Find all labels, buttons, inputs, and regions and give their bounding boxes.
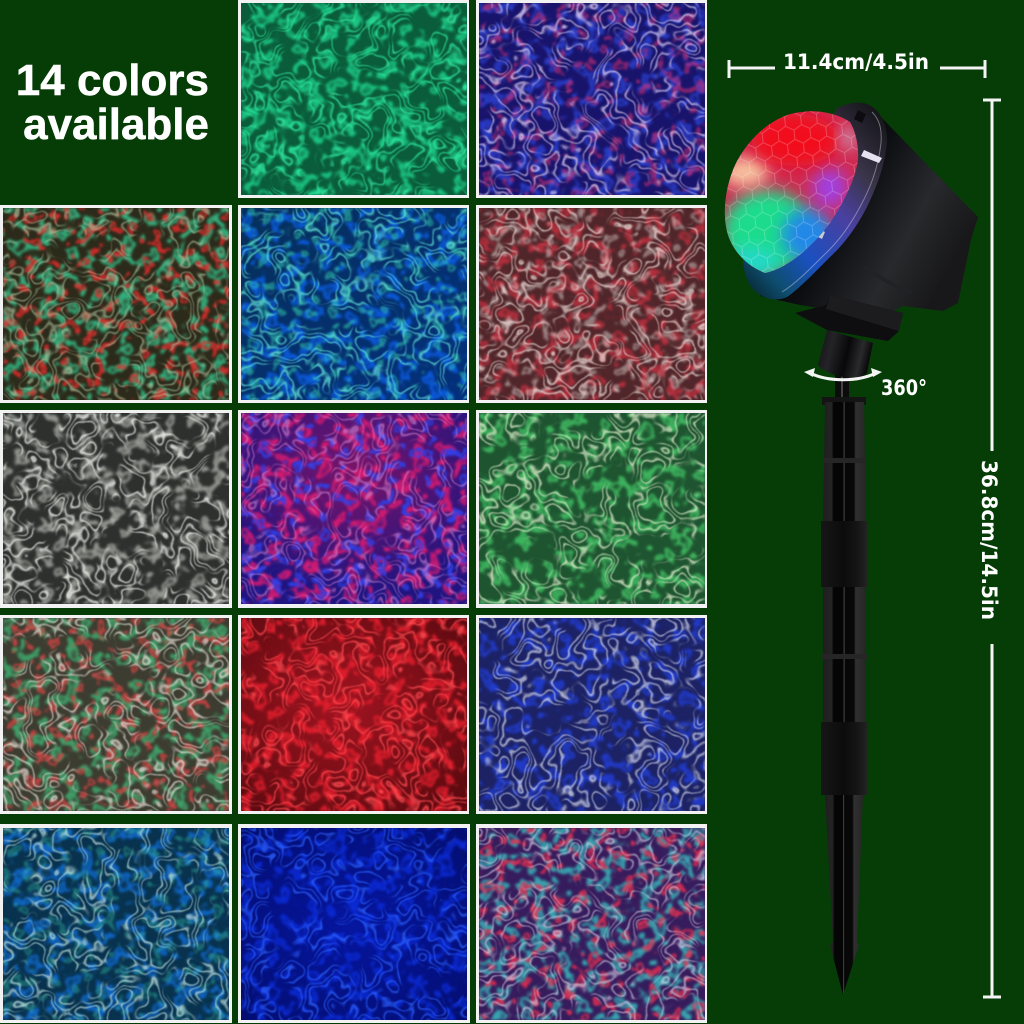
tile: blue and white: [476, 615, 707, 814]
tile: blue and teal: [238, 205, 469, 403]
tile: red and white: [476, 205, 707, 403]
tile: red and green: [0, 205, 232, 403]
dome light: [724, 111, 858, 273]
ground stake: [821, 372, 867, 995]
tile: red green white: [0, 615, 232, 814]
rotation arrow: [804, 368, 882, 380]
tile: blue purple with pink: [476, 0, 707, 198]
rim clips: [861, 150, 882, 163]
spotlight projector: [715, 100, 978, 378]
title: available: [23, 100, 209, 149]
tile: green: [238, 0, 469, 198]
title: 14 colors: [16, 56, 209, 105]
width dimension: 11.4cm/4.5in: [783, 50, 929, 74]
swivel neck: [818, 330, 873, 378]
tile: red: [238, 615, 469, 814]
housing: [760, 116, 978, 318]
tile: magenta and blue: [238, 410, 469, 608]
tile: blue teal white: [0, 824, 232, 1023]
glass rim: [743, 103, 887, 299]
tile: white: [0, 410, 232, 608]
width dimension: [729, 50, 985, 78]
vent slot: [864, 268, 912, 293]
height dimension: [977, 100, 1001, 997]
tile: green and white: [476, 410, 707, 608]
tile: deep blue: [238, 824, 470, 1023]
tile: multicolor: [476, 824, 707, 1023]
bracket: [795, 295, 903, 341]
rotation label: 360°: [881, 376, 927, 400]
title: [16, 56, 209, 149]
height dimension: 36.8cm/14.5in: [977, 460, 1001, 620]
